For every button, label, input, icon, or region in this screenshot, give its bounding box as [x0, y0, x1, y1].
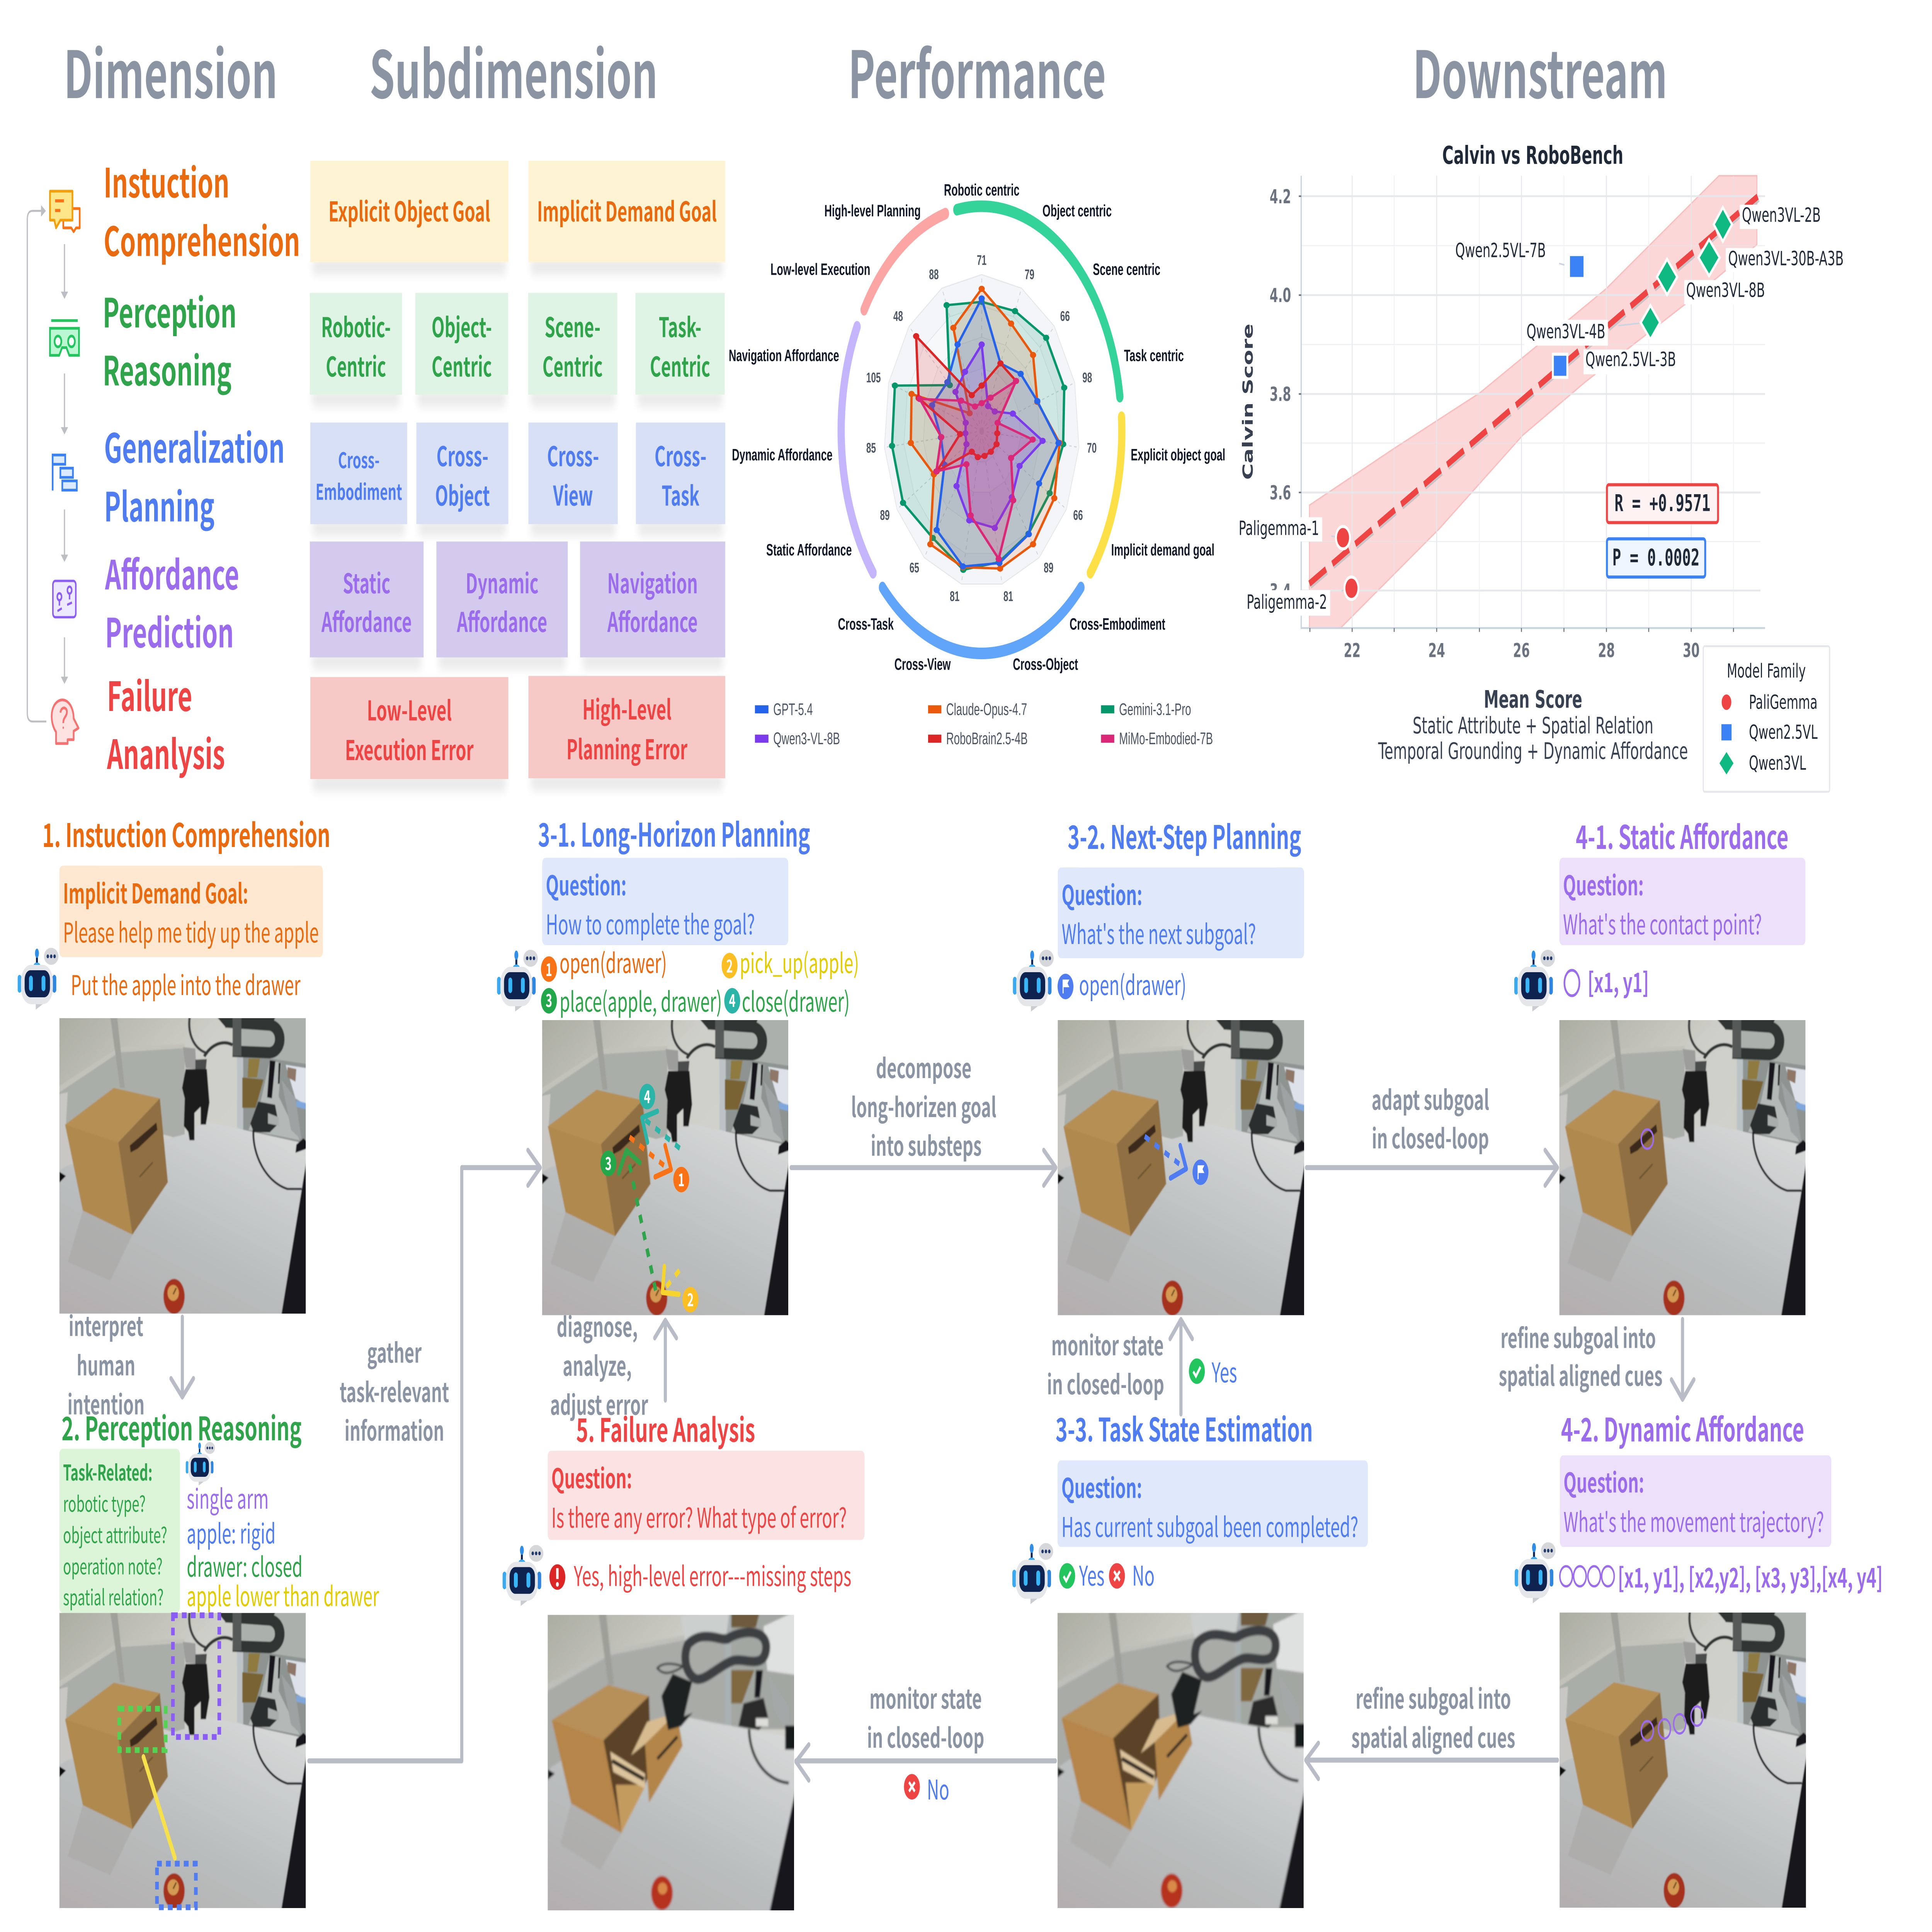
series: GPT-5.4	[932, 298, 1059, 566]
y-axis title: Calvin Score	[1240, 323, 1256, 480]
P statistic box	[1607, 539, 1705, 577]
step 1 photo	[54, 1010, 312, 1321]
step 1 question box: Please help me tidy up the apple	[63, 911, 319, 950]
label: Affordance Prediction	[105, 543, 239, 659]
step 4-2 heading: 4-2. Dynamic Affordance	[1561, 1405, 1804, 1451]
flow label: diagnose analyze adjust error: diagnose,	[557, 1305, 638, 1345]
flow label: gather task-relevant information: gather	[367, 1331, 422, 1371]
step 3-3 question box	[1058, 1460, 1368, 1547]
step 3-3 answer: No	[1132, 1554, 1155, 1594]
step 3-1 plan list: 3	[546, 987, 552, 1012]
flow label: decompose long-horizen goal into substeps: decompose	[876, 1046, 971, 1086]
series: Gemini-3.1-Pro	[892, 302, 1064, 570]
radar labels: Explicit object goal	[1131, 446, 1225, 464]
step 2 question box: object attribute?	[63, 1519, 167, 1549]
radar labels: Implicit demand goal	[1111, 541, 1214, 559]
radar axis maxima: 105	[866, 370, 881, 386]
arrow: step 1 to step 2	[171, 1317, 194, 1397]
radar axis maxima: 81	[950, 589, 959, 604]
scatter legend: PaliGemma	[1749, 691, 1818, 713]
x-axis title	[1378, 686, 1688, 765]
label: Perception Reasoning: Reasoning	[103, 338, 231, 397]
radar axis maxima: 98	[1082, 370, 1092, 386]
flow label: interpret human intention	[68, 1304, 145, 1422]
step 1 heading: 1. Instuction Comprehension	[42, 810, 330, 857]
radar legend: RoboBrain2.5-4B	[946, 729, 1028, 748]
panel: perception subdimensions: Centric	[432, 345, 492, 384]
label: Generalization Planning	[104, 416, 285, 533]
planning annotations: 2	[687, 1286, 694, 1312]
radar legend: MiMo-Embodied-7B	[1119, 729, 1213, 748]
panel: affordance subdimensions: Affordance	[457, 600, 547, 640]
robot icon	[1012, 1543, 1053, 1604]
perception annotations	[119, 1615, 219, 1907]
no marker	[904, 1768, 949, 1808]
flow label: monitor state in closed-loop: monitor state	[869, 1677, 982, 1717]
step 4-2 answer: [x1, y1], [x2,y2], [x3, y3],[x4, y4]	[1618, 1556, 1883, 1595]
step 2 answers: single arm	[187, 1477, 269, 1517]
radar labels: High-level Planning	[824, 201, 921, 220]
radar legend	[755, 700, 1213, 748]
flow label: adapt subgoal in closed-loop: adapt subgoal	[1372, 1078, 1489, 1117]
scatter points	[1336, 207, 1732, 599]
panel: failure subdimensions: Planning Error	[566, 728, 688, 767]
planning annotations: 3	[605, 1150, 612, 1175]
arrow: step 4-2 to step 3-3	[1306, 1743, 1558, 1779]
step 4-2 question box: Question:	[1563, 1461, 1644, 1500]
label: Instuction Comprehension: Instuction	[104, 151, 230, 209]
arrow: step 3-3 to step 5	[796, 1745, 1055, 1780]
step 2 photo	[54, 1605, 312, 1915]
radar legend: GPT-5.4	[773, 700, 813, 719]
panel: perception subdimensions: Scene-	[545, 306, 600, 345]
radar labels: Robotic centric	[944, 180, 1019, 199]
radar legend: Gemini-3.1-Pro	[1119, 700, 1191, 719]
flow label: diagnose analyze adjust error: adjust error	[550, 1383, 648, 1423]
panel: planning subdimensions: Task	[662, 474, 699, 514]
flow label: decompose long-horizen goal into substeps: long-horizen goal	[851, 1085, 997, 1125]
panel: affordance subdimensions	[310, 541, 725, 657]
flow label: adapt subgoal in closed-loop: in closed-loop	[1372, 1117, 1489, 1156]
label: Instuction Comprehension: Comprehension	[104, 209, 300, 268]
radar labels: Dynamic Affordance	[732, 446, 832, 464]
step 3-1 plan list: 2	[726, 952, 733, 978]
yes marker	[1189, 1351, 1237, 1390]
x-axis title: Temporal Grounding + Dynamic Affordance	[1378, 738, 1688, 765]
x-axis title: Mean Score	[1484, 686, 1582, 714]
radar axis maxima: 89	[880, 508, 890, 523]
contact point ring	[1641, 1129, 1653, 1149]
radar labels: Object centric	[1043, 201, 1112, 220]
R statistic box	[1607, 485, 1718, 522]
step 4-1 question box	[1560, 858, 1805, 945]
heading: Performance: Performance	[848, 24, 1106, 117]
radar labels: Cross-Task	[838, 615, 894, 633]
scatter point labels: Qwen3VL-2B	[1742, 204, 1821, 227]
scatter chart: 3.6	[1270, 481, 1291, 504]
dimension flow arrows	[27, 205, 68, 721]
scatter chart: 22	[1344, 639, 1361, 662]
label: Generalization Planning: Generalization	[104, 416, 285, 474]
flow label: monitor state in closed-loop: in closed-loop	[1047, 1363, 1164, 1402]
step 3-3 heading: 3-3. Task State Estimation	[1056, 1405, 1313, 1451]
panel: planning subdimensions: Cross-	[338, 444, 380, 474]
yes marker: Yes	[1211, 1351, 1237, 1390]
scatter legend: Model Family	[1727, 660, 1806, 682]
planning annotations	[600, 1083, 699, 1313]
radar axis maxima	[866, 253, 1097, 604]
label: Failure Ananlysis: Ananlysis	[107, 722, 225, 781]
scatter chart: 26	[1513, 639, 1530, 662]
panel: planning subdimensions: Embodiment	[316, 475, 402, 506]
radar axis maxima: 66	[1060, 309, 1070, 324]
flow label: decompose long-horizen goal into substeps	[851, 1046, 997, 1163]
step 2 answers	[187, 1477, 379, 1614]
panel: planning subdimensions: Cross-	[547, 435, 599, 474]
step 3-3 question box: Has current subgoal been completed?	[1061, 1505, 1358, 1545]
step 3-2 question box	[1058, 867, 1304, 958]
flow label: refine subgoal into spatial aligned cues: spatial aligned cues	[1351, 1716, 1515, 1756]
radar labels: Navigation Affordance	[729, 346, 839, 365]
series: RoboBrain2.5-4B	[916, 336, 1016, 471]
label: Failure Ananlysis	[107, 664, 225, 781]
panel: planning subdimensions	[310, 423, 725, 524]
step 3-1 plan list: pick_up(apple)	[740, 941, 859, 981]
series: Claude-Opus-4.7	[911, 289, 1060, 568]
step 3-1 plan list: close(drawer)	[742, 980, 850, 1019]
radar axis maxima: 65	[910, 560, 919, 576]
scatter point labels: Paligemma-1	[1239, 517, 1319, 540]
step 2 question box: robotic type?	[63, 1487, 146, 1518]
step 2 answers: apple: rigid	[187, 1512, 276, 1551]
step 3-1 plan list: 1	[546, 956, 552, 981]
flow label: refine subgoal into spatial aligned cues	[1499, 1316, 1663, 1394]
scatter chart: 28	[1598, 639, 1615, 662]
R statistic box: R = +0.9571	[1614, 490, 1711, 517]
no marker: No	[927, 1768, 949, 1808]
panel: goal subdimensions	[310, 161, 725, 262]
scatter point labels: Qwen3VL-30B-A3B	[1728, 248, 1844, 270]
step 3-3 question box: Question:	[1061, 1466, 1142, 1506]
step 4-2 question box	[1560, 1455, 1831, 1547]
flow label: gather task-relevant information: task-relevant	[340, 1371, 449, 1410]
scatter point labels: Paligemma-2	[1247, 591, 1327, 614]
label: Perception Reasoning: Perception	[103, 281, 236, 339]
panel: perception subdimensions: Task-	[659, 306, 701, 345]
icon: planning hierarchy	[53, 454, 77, 490]
flow label: decompose long-horizen goal into substeps: into substeps	[871, 1124, 981, 1163]
step 3-1 heading: 3-1. Long-Horizon Planning	[538, 810, 810, 856]
radar labels: Cross-Embodiment	[1070, 615, 1165, 633]
label: Instuction Comprehension	[104, 151, 300, 268]
label: Failure Ananlysis: Failure	[107, 664, 192, 723]
step 4-2 question box: What's the movement trajectory?	[1563, 1500, 1824, 1540]
step 1 question box: Implicit Demand Goal:	[63, 872, 248, 911]
scatter legend: Qwen3VL	[1749, 752, 1806, 774]
robot icon	[503, 1545, 543, 1606]
step 3-1 photo	[536, 1012, 795, 1322]
step 4-2 photo	[1554, 1605, 1813, 1915]
step 5 heading: 5. Failure Analysis	[576, 1405, 755, 1452]
radar labels: Low-level Execution	[770, 260, 870, 279]
next-step annotation	[1145, 1136, 1209, 1185]
heading: Downstream: Downstream	[1413, 24, 1667, 117]
scatter chart: 4.2	[1270, 185, 1291, 208]
step 4-1 question box: What's the contact point?	[1563, 903, 1762, 942]
card shadows	[312, 259, 723, 791]
step 1 question box	[60, 866, 323, 957]
radar axis maxima: 48	[893, 309, 903, 324]
flow label: monitor state in closed-loop: monitor state	[1051, 1324, 1164, 1363]
icon: flag answer	[1058, 974, 1073, 999]
panel: goal subdimensions: Implicit Demand Goal	[537, 190, 717, 229]
radar labels: Scene centric	[1093, 260, 1160, 279]
radar axis maxima: 71	[977, 253, 986, 268]
label: Perception Reasoning	[103, 281, 236, 397]
arrow: step 4-1 to step 4-2	[1672, 1320, 1694, 1400]
radar labels	[729, 180, 1225, 673]
label: Affordance Prediction: Prediction	[105, 600, 234, 659]
radar axis maxima: 66	[1073, 508, 1083, 523]
radar category arcs	[841, 206, 1122, 653]
panel: planning subdimensions: Object	[435, 474, 490, 514]
panel: planning subdimensions: Cross-	[437, 435, 488, 474]
scatter chart: 24	[1428, 639, 1445, 662]
arrow: step 3-2 to step 4-1	[1306, 1150, 1558, 1185]
panel: affordance subdimensions: Static	[343, 562, 390, 601]
icon: instruction chat	[50, 191, 80, 232]
arrow: step 3-3 to step 3-2	[1170, 1320, 1192, 1414]
step 4-1 question box: Question:	[1563, 864, 1644, 903]
step 3-2 photo	[1052, 1012, 1311, 1322]
panel: perception subdimensions: Centric	[543, 345, 603, 384]
robot icon	[1013, 950, 1054, 1012]
planning annotations: 1	[678, 1166, 685, 1192]
scatter chart: 3.8	[1270, 383, 1291, 406]
scatter legend	[1703, 646, 1830, 792]
panel: perception subdimensions: Centric	[326, 345, 386, 384]
scatter legend: Qwen2.5VL	[1749, 721, 1818, 743]
panel: perception subdimensions	[310, 293, 725, 395]
step 5 question box: Is there any error? What type of error?	[551, 1496, 847, 1536]
step 3-1 plan list: open(drawer)	[560, 941, 667, 981]
flow label: diagnose analyze adjust error: analyze,	[563, 1344, 632, 1384]
step 2 question box: Task-Related:	[63, 1456, 153, 1487]
radar labels: Cross-Object	[1013, 655, 1078, 673]
flow label: gather task-relevant information	[340, 1331, 449, 1449]
scatter point labels: Qwen2.5VL-3B	[1585, 349, 1676, 371]
scatter point labels: Qwen2.5VL-7B	[1455, 240, 1546, 262]
robot icon	[497, 950, 538, 1012]
panel: perception subdimensions: Object-	[432, 306, 492, 345]
flow label: refine subgoal into spatial aligned cues: spatial aligned cues	[1499, 1354, 1663, 1394]
robot icon	[18, 948, 58, 1010]
radar axis maxima: 88	[929, 267, 939, 282]
scatter title: Calvin vs RoboBench	[1442, 141, 1623, 170]
flow label: diagnose analyze adjust error	[550, 1305, 648, 1423]
arrow: step 2 to step 3-1	[309, 1150, 540, 1761]
panel: affordance subdimensions: Dynamic	[466, 562, 539, 601]
step 1 answer: Put the apple into the drawer	[71, 963, 301, 1003]
scatter chart: 4.0	[1270, 284, 1291, 307]
radar labels: Static Affordance	[766, 541, 852, 559]
step 3-2 answer: open(drawer)	[1079, 963, 1186, 1003]
scatter point labels: Qwen3VL-4B	[1527, 321, 1605, 344]
step 5 answer: Yes, high-level error---missing steps	[573, 1554, 851, 1594]
step 4-1 heading: 4-1. Static Affordance	[1576, 812, 1789, 859]
panel: planning subdimensions: Cross-	[655, 435, 706, 474]
flow label: monitor state in closed-loop: in closed-loop	[867, 1716, 984, 1756]
step 3-3 answer	[1059, 1554, 1155, 1594]
panel: failure subdimensions: Low-Level	[367, 689, 452, 728]
icon: perception headset	[50, 321, 79, 355]
step 2 question box: operation note?	[63, 1550, 163, 1581]
trajectory rings	[1641, 1706, 1703, 1740]
flow label: interpret human intention: intention	[68, 1383, 145, 1422]
step 3-3 photo	[1052, 1605, 1310, 1916]
panel: goal subdimensions: Explicit Object Goal	[328, 190, 490, 229]
radar legend: Claude-Opus-4.7	[946, 700, 1027, 719]
flow label: refine subgoal into spatial aligned cues: refine subgoal into	[1355, 1677, 1511, 1717]
step 2 answers: drawer: closed	[187, 1545, 303, 1585]
planning annotations: 4	[644, 1083, 650, 1109]
step 3-2 heading: 3-2. Next-Step Planning	[1068, 812, 1301, 859]
panel: perception subdimensions: Centric	[650, 345, 710, 384]
icon: failure head	[52, 700, 78, 743]
P statistic box: P = 0.0002	[1612, 544, 1699, 571]
flow label: interpret human intention: interpret	[69, 1304, 143, 1344]
arrow: step 3-1 to step 3-2	[791, 1150, 1056, 1185]
step 2 question box	[60, 1449, 180, 1613]
radar axis maxima: 79	[1025, 267, 1034, 282]
flow label: monitor state in closed-loop	[1047, 1324, 1164, 1402]
panel: failure subdimensions	[310, 676, 725, 779]
flow label: monitor state in closed-loop	[867, 1677, 984, 1756]
radar axis maxima: 89	[1044, 560, 1053, 576]
step 3-1 plan list	[541, 941, 859, 1019]
robot icon	[1515, 1542, 1556, 1603]
step 5 question box: Question:	[551, 1457, 632, 1496]
panel: affordance subdimensions: Navigation	[607, 562, 698, 601]
scatter chart	[1236, 176, 1847, 662]
radar labels: Cross-View	[895, 655, 951, 673]
scatter chart: 30	[1683, 639, 1700, 662]
arrow: step 5 to step 3-1	[655, 1320, 677, 1400]
step 3-2 question box: What's the next subgoal?	[1062, 912, 1256, 952]
heading: Dimension: Dimension	[64, 24, 277, 117]
radar axis maxima: 81	[1003, 589, 1013, 604]
flow label: adapt subgoal in closed-loop	[1372, 1078, 1489, 1156]
step 3-1 plan list: place(apple, drawer)	[560, 980, 722, 1019]
step 2 heading: 2. Perception Reasoning	[61, 1403, 302, 1450]
scatter point labels: Qwen3VL-8B	[1686, 279, 1765, 302]
step 3-1 question box: Question:	[546, 864, 626, 903]
flow label: gather task-relevant information: information	[345, 1409, 444, 1449]
radar legend: Qwen3-VL-8B	[773, 729, 840, 748]
flow label: interpret human intention: human	[77, 1344, 135, 1383]
step 5 question box	[548, 1451, 865, 1540]
radar labels: Task centric	[1124, 346, 1184, 365]
panel: failure subdimensions: High-Level	[582, 688, 672, 728]
radar axis maxima: 70	[1087, 440, 1097, 456]
series: MiMo-Embodied-7B	[920, 381, 1033, 559]
label: Generalization Planning: Planning	[104, 474, 214, 533]
step 5 photo	[542, 1607, 801, 1918]
scatter chart: 3.4	[1270, 580, 1291, 602]
panel: affordance subdimensions: Affordance	[321, 600, 412, 640]
label: Affordance Prediction: Affordance	[105, 543, 239, 601]
step 3-2 question box: Question:	[1062, 874, 1142, 913]
panel: affordance subdimensions: Affordance	[607, 600, 698, 640]
flow label: refine subgoal into spatial aligned cues: refine subgoal into	[1500, 1316, 1656, 1356]
heading: Subdimension: Subdimension	[369, 24, 658, 117]
x-axis title: Static Attribute + Spatial Relation	[1413, 712, 1653, 739]
step 4-1 photo	[1554, 1012, 1812, 1322]
robot icon	[186, 1442, 215, 1485]
flow label: refine subgoal into spatial aligned cues	[1351, 1677, 1515, 1756]
step 3-1 question box	[542, 858, 788, 945]
panel: perception subdimensions: Robotic-	[321, 306, 391, 345]
step 2 answers: apple lower than drawer	[187, 1575, 379, 1614]
series: Qwen3-VL-8B	[956, 345, 1043, 528]
radar chart	[729, 180, 1225, 673]
step 3-1 plan list: 4	[729, 987, 735, 1012]
step 2 question box: spatial relation?	[63, 1581, 163, 1612]
icon: affordance map	[53, 581, 76, 617]
scatter point labels	[1236, 204, 1847, 616]
radar axis maxima: 85	[866, 440, 876, 456]
panel: failure subdimensions: Execution Error	[345, 729, 474, 768]
panel: planning subdimensions: View	[553, 474, 593, 514]
step 4-1 answer: [x1, y1]	[1588, 961, 1649, 1000]
step 3-1 question box: How to complete the goal?	[546, 903, 755, 942]
robot icon	[1514, 950, 1555, 1012]
step 3-3 answer: Yes	[1079, 1554, 1104, 1594]
